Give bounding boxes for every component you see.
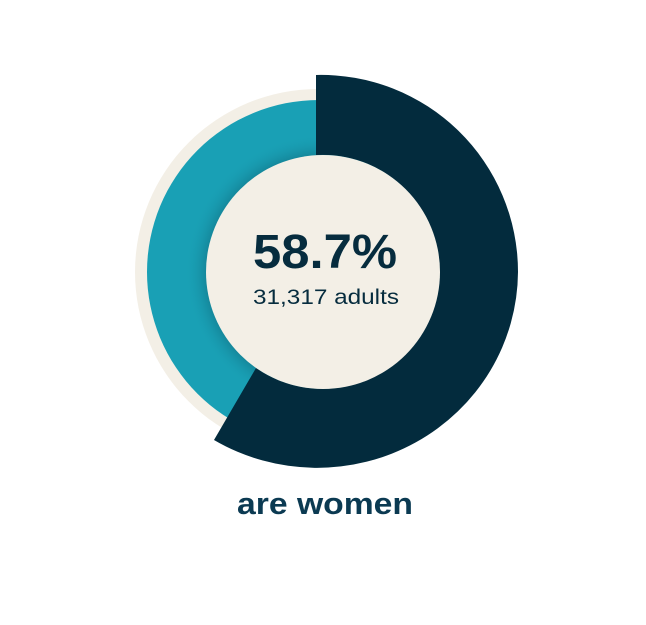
background ring bbox=[135, 89, 501, 455]
segment: teal remainder bbox=[147, 100, 491, 444]
caption: are women bbox=[237, 486, 413, 521]
value label: 58.7% bbox=[253, 226, 397, 279]
segment: dark 58.7% bbox=[214, 75, 518, 468]
count label: 31,317 adults bbox=[253, 286, 399, 309]
inner circle bbox=[206, 155, 440, 389]
value label bbox=[253, 226, 399, 309]
